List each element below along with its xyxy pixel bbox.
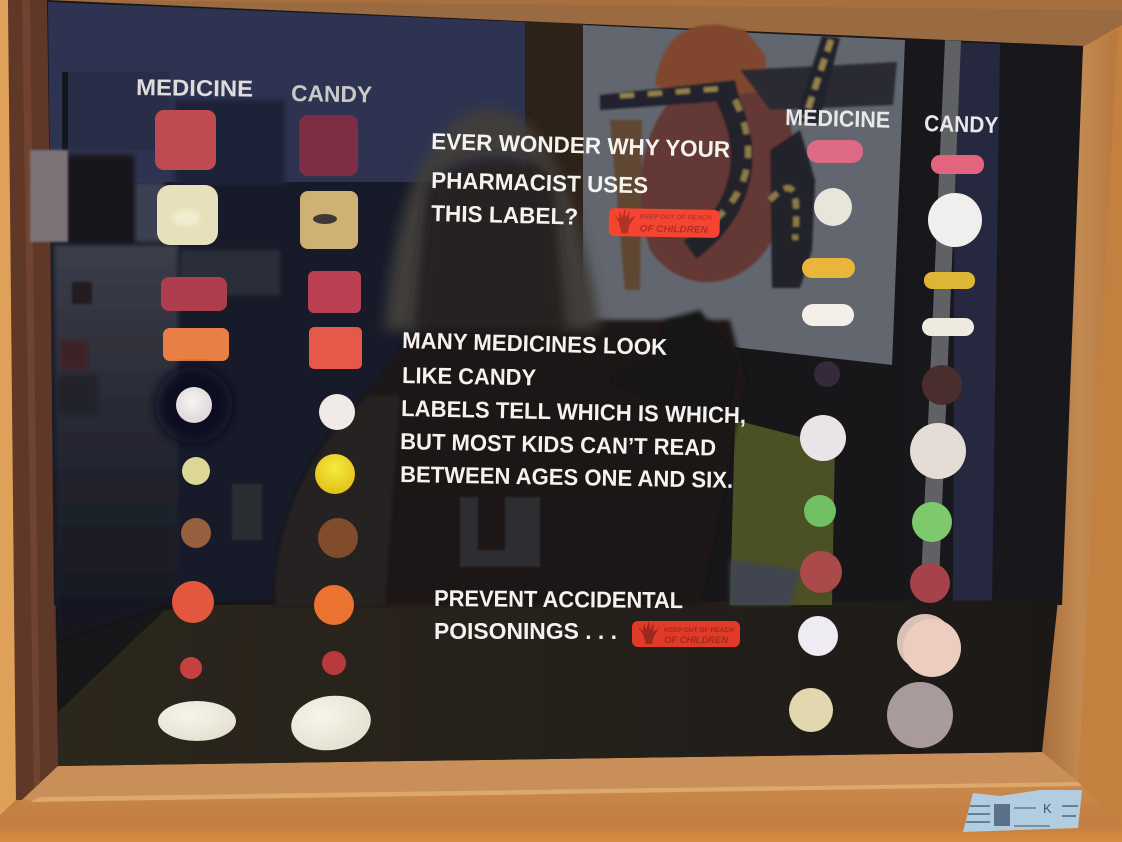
right candy samples: [887, 155, 984, 748]
paper sticker on frame: K: [1043, 801, 1052, 816]
text block: pharmacist question: [431, 128, 731, 230]
heading: left candy column: CANDY: [291, 80, 372, 107]
text block: medicines look like candy: LABELS TELL WHICH IS WHICH,: [401, 395, 746, 428]
heading: right medicine column: MEDICINE: [785, 104, 891, 133]
reflected photographer silhouette: [275, 108, 745, 605]
warning label: bottom: KEEP OUT OF REACH: [664, 628, 734, 634]
warning label: top: [609, 208, 720, 238]
text block: prevent poisonings: PREVENT ACCIDENTAL: [434, 585, 683, 613]
icon: hand: [614, 208, 636, 233]
text block: pharmacist question: PHARMACIST USES: [431, 167, 648, 198]
warning label: bottom: OF CHILDREN: [664, 635, 729, 645]
text block: prevent poisonings: [434, 585, 683, 644]
left medicine samples: [155, 110, 236, 741]
warning label: top: KEEP OUT OF REACH: [640, 214, 712, 222]
text block: medicines look like candy: LIKE CANDY: [402, 362, 536, 390]
text block: medicines look like candy: BETWEEN AGES ONE AND SIX.: [400, 461, 733, 493]
heading: left medicine column: MEDICINE: [136, 74, 253, 102]
paper sticker on frame: [963, 790, 1082, 832]
text block: prevent poisonings: POISONINGS . . .: [434, 618, 617, 644]
warning label: top: OF CHILDREN: [640, 224, 709, 236]
left candy samples: [288, 115, 374, 755]
text block: pharmacist question: EVER WONDER WHY YOUR: [431, 128, 731, 162]
heading: right candy column: CANDY: [924, 110, 999, 138]
text block: pharmacist question: THIS LABEL?: [431, 200, 578, 230]
reflected heart poster: [583, 25, 905, 365]
text block: medicines look like candy: BUT MOST KIDS CAN’T READ: [400, 428, 716, 461]
right medicine samples: [789, 140, 863, 732]
warning label: bottom: [632, 621, 740, 647]
text block: medicines look like candy: [400, 327, 746, 493]
text block: medicines look like candy: MANY MEDICINES LOOK: [402, 327, 668, 360]
icon: hand: [638, 621, 659, 644]
